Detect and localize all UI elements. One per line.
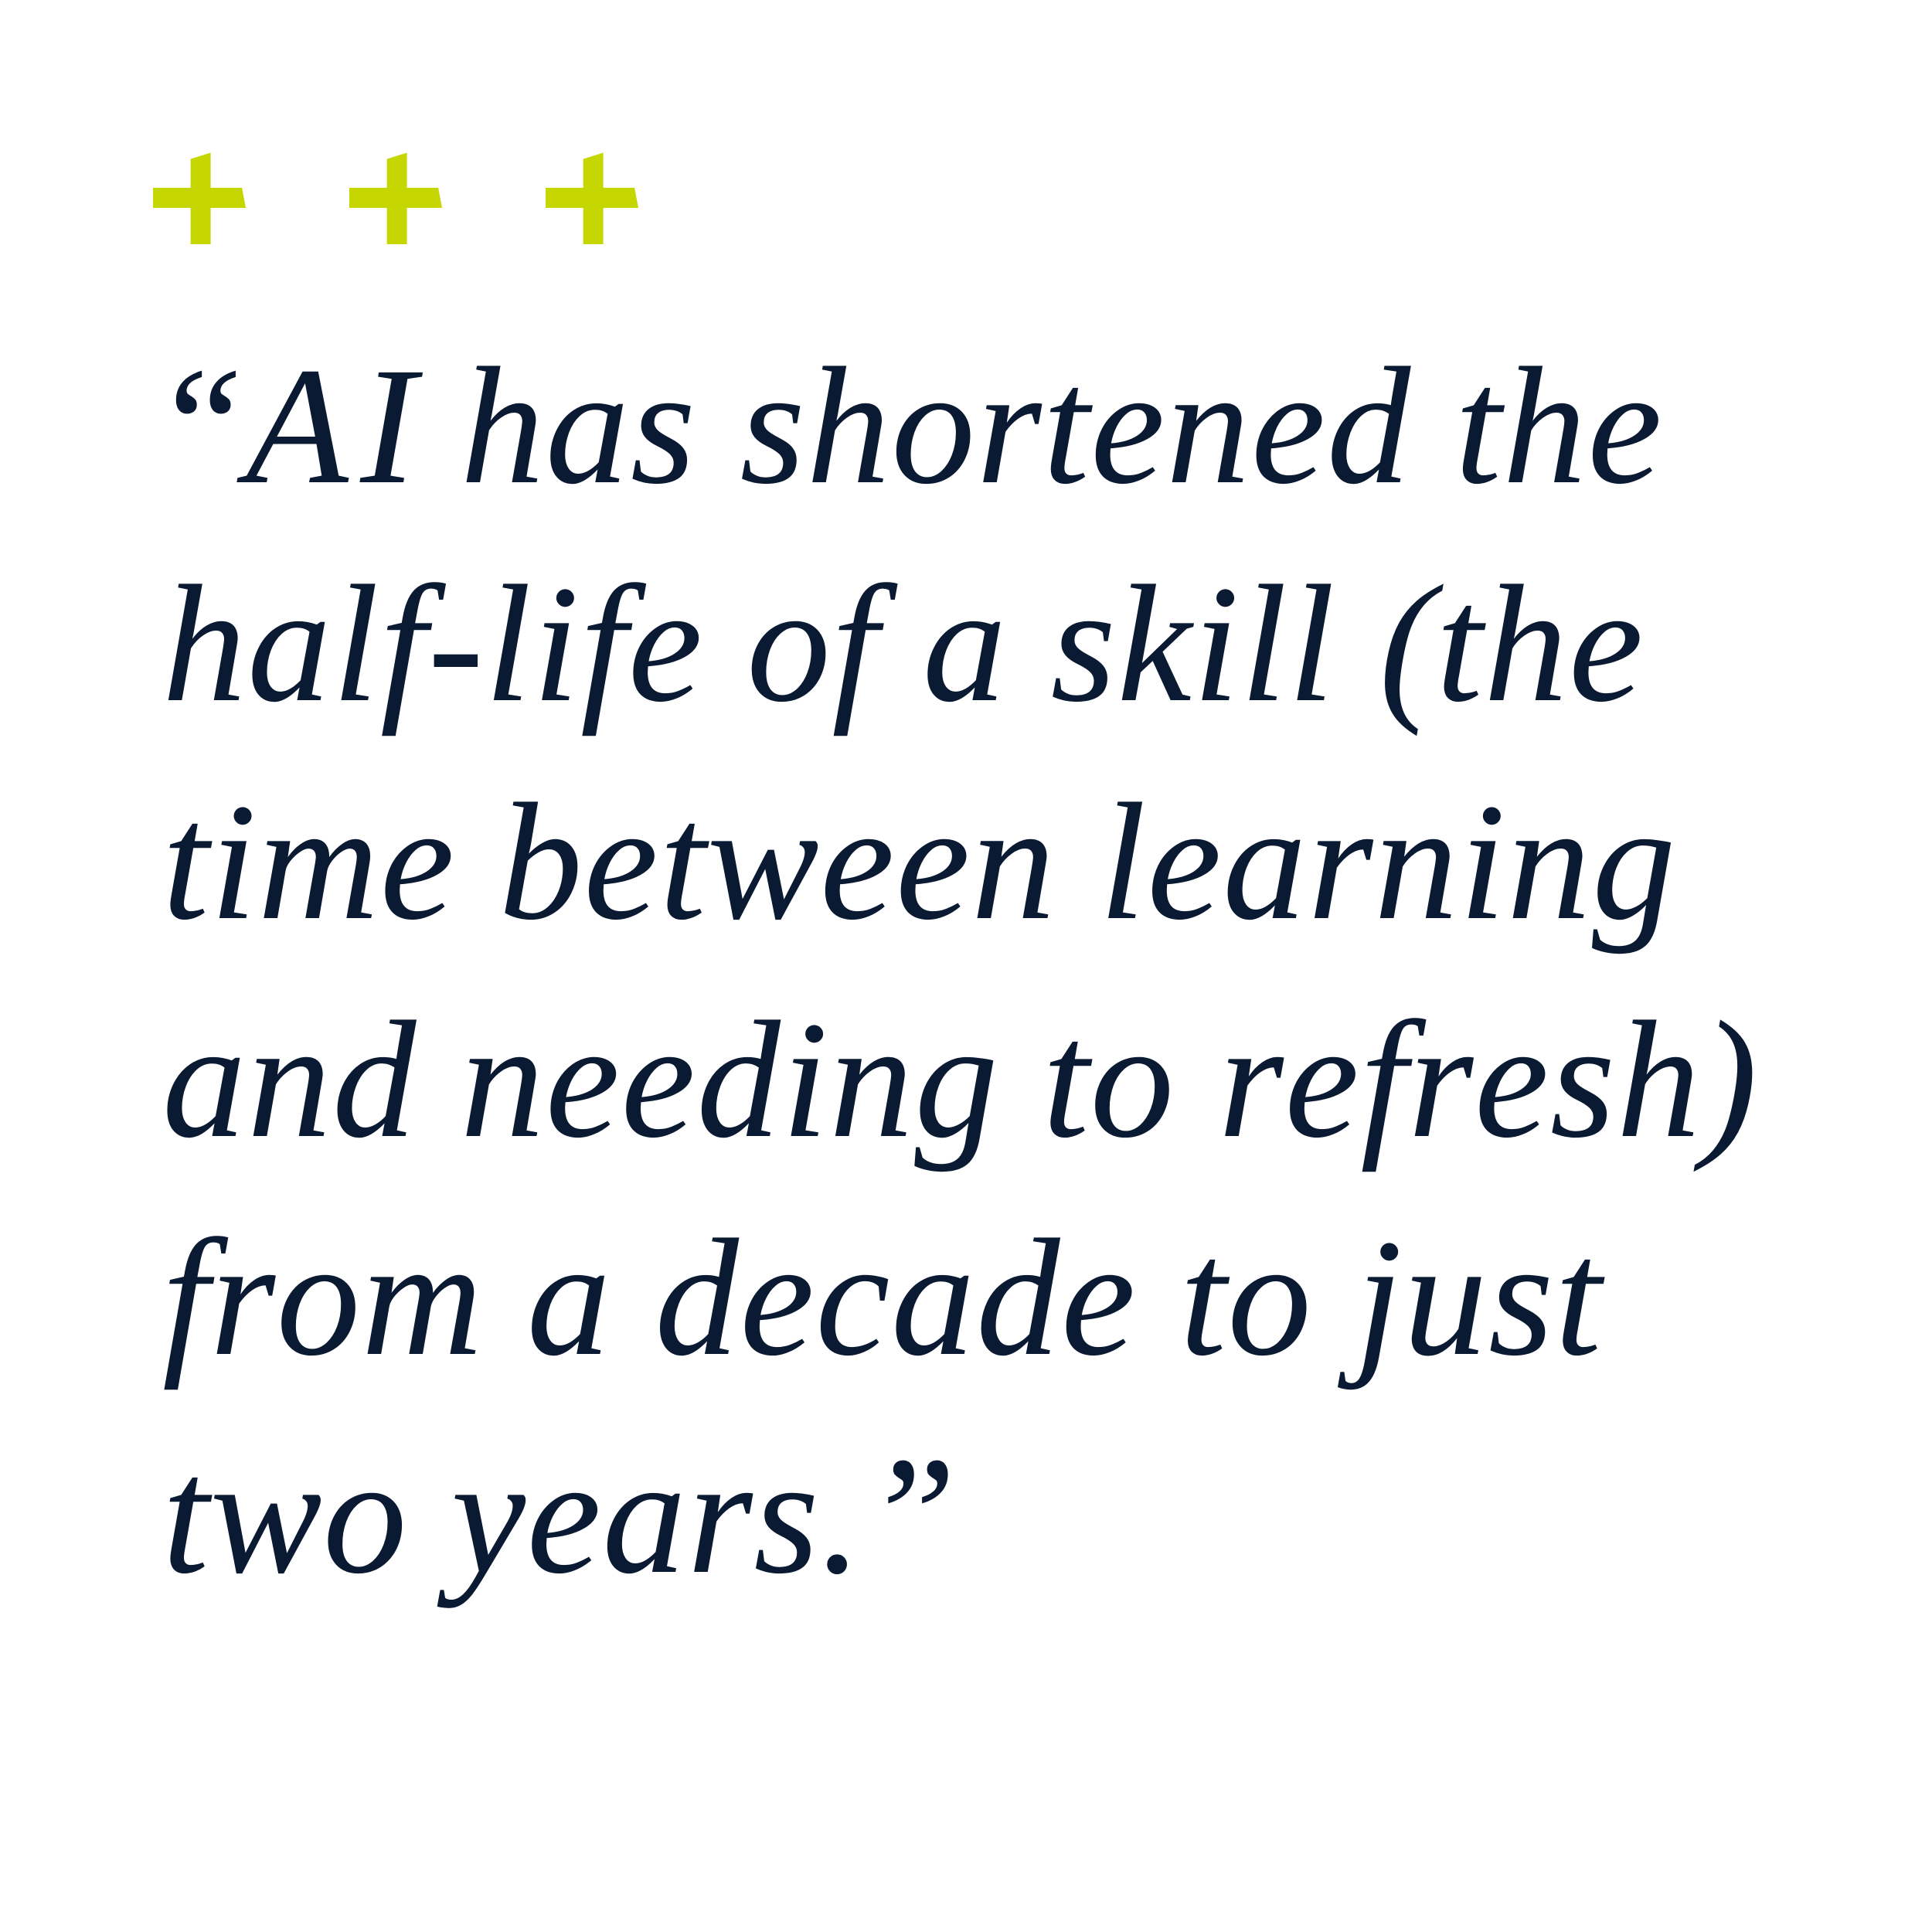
icon: plus 2 bbox=[349, 153, 442, 244]
quote text: two years.” bbox=[162, 1423, 957, 1608]
quote text: half-life of a skill (the bbox=[162, 551, 1645, 736]
icon: plus 1 bbox=[153, 153, 246, 244]
quote text: and needing to refresh) bbox=[162, 987, 1758, 1172]
quote text: time between learning bbox=[162, 769, 1677, 954]
icon: plus 3 bbox=[546, 153, 638, 244]
quote text: “AI has shortened the bbox=[151, 333, 1663, 519]
icon: plus signs bbox=[153, 153, 638, 244]
quote text bbox=[151, 333, 1758, 1608]
quote text: from a decade to just bbox=[162, 1205, 1603, 1390]
